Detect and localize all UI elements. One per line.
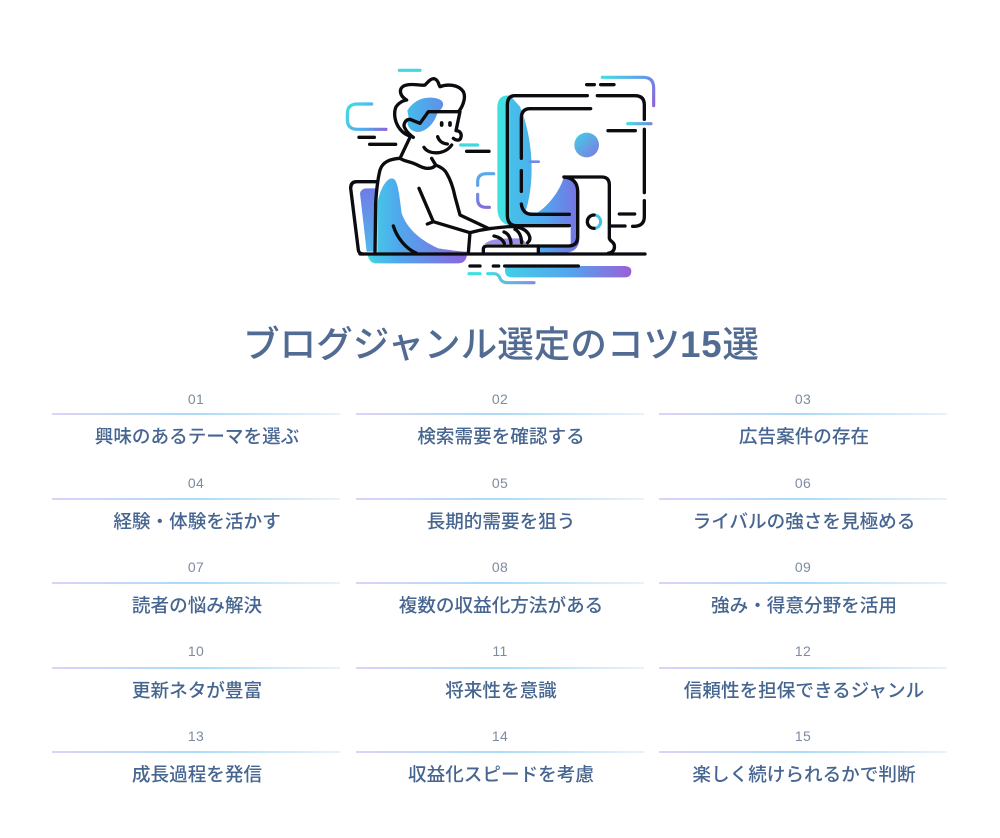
title: ブログジャンル選定のコツ15選 [243, 324, 759, 365]
item 01: 興味のあるテーマを選ぶ [95, 426, 299, 447]
item 04 [52, 475, 340, 532]
accent strokes [347, 70, 654, 283]
item 11: 11 [492, 643, 508, 659]
item 02: 02 [492, 391, 508, 407]
item 12: 信頼性を担保できるジャンル [684, 680, 924, 701]
body [375, 158, 436, 253]
black line art [351, 79, 645, 266]
item 08 [356, 559, 644, 616]
item 09: 強み・得意分野を活用 [711, 595, 897, 616]
monitor outer [507, 96, 587, 226]
dashes [359, 137, 396, 144]
item 13 [52, 728, 340, 785]
item 02 [356, 391, 644, 447]
item 08: 複数の収益化方法がある [399, 595, 603, 616]
item 14: 収益化スピードを考慮 [408, 764, 594, 785]
stand [564, 177, 614, 253]
item 06 [659, 475, 947, 532]
item 08: 08 [492, 559, 508, 575]
item 05: 長期的需要を狙う [427, 511, 575, 532]
item 14 [356, 728, 644, 785]
item 11 [356, 643, 644, 701]
item 02: 検索需要を確認する [417, 426, 585, 447]
item 05: 05 [492, 475, 508, 491]
item 03: 広告案件の存在 [739, 426, 869, 447]
item 13: 成長過程を発信 [132, 764, 262, 785]
item 01: 01 [188, 391, 204, 407]
item 11: 将来性を意識 [445, 680, 557, 701]
item 07 [52, 559, 340, 616]
item 10 [52, 643, 340, 701]
illustration: person working at computer [346, 68, 656, 284]
item 15: 15 [795, 728, 811, 744]
item 07: 07 [188, 559, 204, 575]
item 14: 14 [492, 728, 508, 744]
item 03: 03 [795, 391, 811, 407]
item 15: 楽しく続けられるかで判断 [692, 764, 916, 785]
item 15 [659, 728, 947, 785]
item 12 [659, 643, 947, 701]
item 06: 06 [795, 475, 811, 491]
item 01 [52, 391, 340, 447]
face [453, 112, 461, 140]
item 06: ライバルの強さを見極める [693, 511, 915, 532]
item 04: 経験・体験を活かす [113, 511, 281, 532]
item 09 [659, 559, 947, 616]
keyboard [483, 246, 538, 253]
item 10: 更新ネタが豊富 [132, 680, 262, 701]
item 04: 04 [188, 475, 204, 491]
hair [395, 79, 464, 137]
desk [360, 249, 645, 259]
item 12: 12 [795, 643, 811, 659]
item 10: 10 [188, 643, 204, 659]
item 07: 読者の悩み解決 [132, 595, 262, 616]
chair [351, 182, 377, 254]
item 09: 09 [795, 559, 811, 575]
item 13: 13 [188, 728, 204, 744]
blue gradient fills [360, 95, 631, 277]
monitor inner [521, 109, 591, 158]
item 05 [356, 475, 644, 532]
item 03 [659, 391, 947, 447]
